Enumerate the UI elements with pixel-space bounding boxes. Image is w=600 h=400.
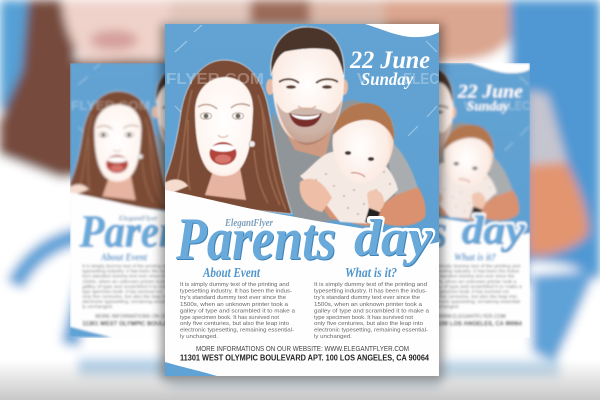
man arm (318, 187, 426, 226)
left body text: typesetting industry. It has been the indus- (180, 289, 292, 295)
footer address line: 11301 WEST OLYMPIC BOULEVARD APT. 100 LOS ANGELES, CA 90064 (180, 354, 430, 362)
baby head (333, 103, 394, 183)
headline: Parents day: day (355, 211, 434, 268)
right body text: typesetting industry. It has been the indus- (314, 289, 427, 295)
background: blue right (510, 0, 600, 285)
right body text: type specimen book. It has survived not (314, 315, 414, 321)
right body text: try's standard dummy text ever since the (314, 295, 420, 301)
right body text: galley of type and scrambled it to make a (314, 308, 429, 314)
man beard (276, 100, 342, 145)
background: mouth (90, 30, 138, 50)
right body text (314, 282, 429, 340)
left body text: galley of type and scrambled it to make a (180, 308, 295, 314)
bottom left blue corner (165, 362, 217, 376)
woman earring (249, 141, 255, 147)
man shirt (272, 100, 418, 225)
left body text: It is simply dummy text of the printing and (180, 282, 289, 288)
woman hair highlights (176, 90, 286, 210)
date: 22 June: 22 June (349, 47, 430, 74)
brand: ElegantFlyer: ElegantFlyer (224, 218, 273, 229)
man face (272, 46, 344, 143)
woman face (195, 77, 253, 176)
right body text: electronic typesetting, remaining essential- (314, 328, 428, 334)
baby eyes (345, 151, 374, 161)
background: grey sleeve (528, 90, 568, 175)
family photo (165, 27, 426, 226)
right body text: 1500s, when an unknown printer took a (314, 302, 422, 308)
left body text: type specimen book. It has survived not (180, 315, 280, 321)
baby left hand (300, 179, 332, 212)
right body text: ly unchanged. (314, 334, 352, 340)
headline: Parents day: Parents (175, 206, 336, 272)
background: blurred footer letters (78, 358, 168, 376)
day: Sunday: Sunday (361, 69, 414, 89)
woman eyes and brows (198, 104, 250, 119)
right body text: It is simply dummy text of the printing and (314, 282, 427, 288)
background: hair (0, 0, 170, 178)
background: arm (528, 162, 588, 256)
right flyer (blurred) (439, 63, 530, 338)
left body text (180, 282, 295, 340)
background bottom shadow (0, 360, 600, 400)
left body text: try's standard dummy text ever since the (180, 295, 286, 301)
baby hair (333, 103, 394, 142)
heading: About Event: About Event (202, 266, 261, 281)
watermark: ELEC (403, 71, 439, 88)
watermark: FLYER.COM (166, 71, 264, 88)
headline: Parents day: day (354, 210, 433, 267)
baby right hand (367, 190, 384, 212)
baby onesie (300, 151, 398, 224)
woman hair (165, 60, 292, 214)
headline: Parents day: day (354, 210, 433, 267)
baby mouth (351, 173, 365, 177)
flyer shadow (161, 24, 443, 380)
left body text: 1500s, when an unknown printer took a (180, 302, 288, 308)
watermark (166, 71, 439, 88)
left flyer (blurred) (70, 63, 165, 338)
left body text: electronic typesetting, remaining essential- (180, 328, 294, 334)
man mouth (289, 113, 322, 127)
white lower panel (165, 190, 439, 376)
background: blue day letter (532, 270, 596, 362)
background: woman face (62, 0, 170, 62)
decorative dashes (175, 25, 437, 136)
man teeth (291, 114, 320, 120)
woman neck and chest (205, 168, 246, 200)
man sleeve (388, 143, 418, 197)
baby onesie dots (315, 171, 391, 215)
left body text: ly unchanged. (180, 334, 218, 340)
toy (365, 208, 380, 226)
background: baby head (385, 0, 512, 62)
top right white corner (365, 24, 439, 37)
flyer blue backdrop (165, 24, 439, 376)
right body text: only five centuries, but also the leap into (314, 321, 423, 327)
footer website line: MORE INFORMATIONS ON OUR WEBSITE: WWW.ELEGANTFLYER.COM (196, 344, 409, 353)
background: blue top left (0, 0, 30, 110)
main flyer (165, 24, 439, 376)
man neck (282, 125, 333, 158)
man hair (271, 27, 344, 78)
man nose (298, 106, 316, 109)
woman nose (218, 135, 228, 137)
background: white lower right (528, 254, 600, 291)
left body text: only five centuries, but also the leap into (180, 321, 289, 327)
headline: Parents day: Parents (176, 207, 337, 273)
background: blue P letter (3, 222, 88, 352)
woman mouth (210, 142, 236, 165)
watermark: V (357, 71, 368, 88)
man eyes and brows (279, 79, 338, 89)
man ears (266, 79, 274, 95)
background: top centre band (170, 0, 260, 26)
woman hand (165, 180, 188, 196)
heading: What is it?: What is it? (345, 266, 397, 281)
headline: Parents day: Parents (175, 206, 336, 272)
